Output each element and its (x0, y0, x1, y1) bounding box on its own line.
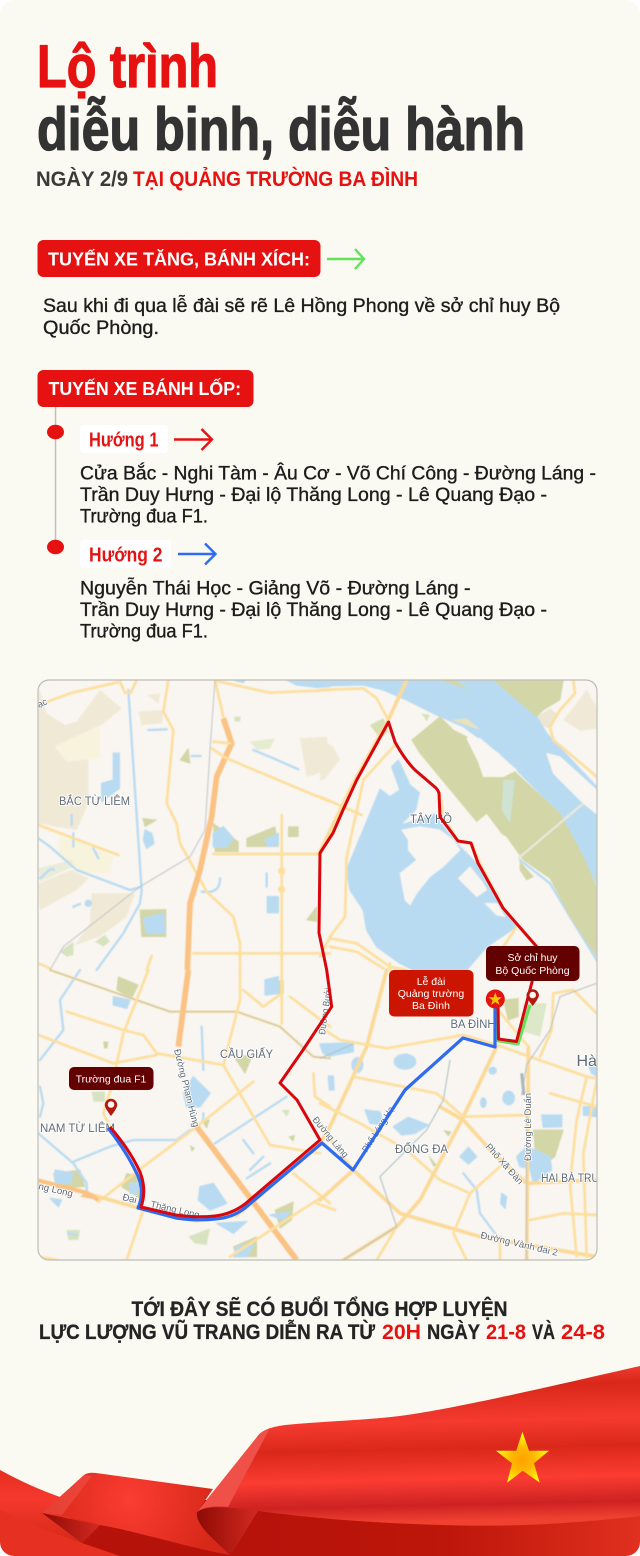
footer note: 24-8 (561, 1321, 605, 1344)
text: direction 1 route: Trường đua F1. (80, 506, 208, 528)
map: place names: NAM TỪ LIÊM (40, 1122, 115, 1135)
map: street names: Thăng Long (149, 1199, 201, 1221)
label: direction 1: Hướng 1 (89, 430, 158, 452)
footer note: NGÀY (427, 1321, 480, 1344)
title: Lộ trình (37, 33, 218, 100)
map: street names: Đường Láng (310, 1115, 350, 1160)
map: place names: BA ĐÌNH (450, 1018, 496, 1031)
heading: wheeled route (38, 370, 254, 407)
star (496, 1432, 549, 1483)
map: place names (40, 795, 625, 1185)
map: place names: HAI BÀ TRƯNG (541, 1172, 616, 1185)
callout: monument: Ba Đình (412, 1000, 450, 1012)
map: street names: Đường Phạm Hùng (171, 1048, 201, 1128)
callout: F1 track: Trường đua F1 (76, 1074, 147, 1086)
map: place names: BẮC TỪ LIÊM (59, 795, 130, 808)
text: direction 2 route: Trần Duy Hưng - Đại lộ Thăng Long - Lê Quang Đạo - (80, 599, 547, 621)
text: tank route description: Quốc Phòng. (43, 317, 159, 339)
map: land use patches (38, 687, 597, 1257)
map border (38, 680, 597, 1260)
map: street names: Đường Vành đai 2 (479, 1230, 559, 1259)
map: street names: Phố Láng Hạ (360, 1104, 397, 1155)
text: tank route description (43, 294, 560, 339)
callout: command post: Bộ Quốc Phòng (495, 965, 570, 977)
heading: tank route: TUYẾN XE TĂNG, BÁNH XÍCH: (48, 248, 310, 270)
arrow: blue (178, 544, 216, 564)
footer note: TỚI ĐÂY SẼ CÓ BUỔI TỔNG HỢP LUYỆN (132, 1297, 508, 1321)
text: direction 2 route: Trường đua F1. (80, 620, 208, 642)
label: direction 2: Hướng 2 (89, 544, 162, 566)
text: direction 1 route: Trần Duy Hưng - Đại lộ Thăng Long - Lê Quang Đạo - (80, 484, 547, 506)
map: street names: Đại (121, 1192, 138, 1206)
route: direction 1 (red) (110, 722, 537, 1217)
heading: wheeled route: TUYẾN XE BÁNH LỐP: (48, 378, 241, 399)
map: place names: CẦU GIẤY (220, 1048, 273, 1061)
title (37, 33, 525, 163)
map: place names: TÂY HỒ (410, 813, 452, 826)
pin: command post (526, 989, 539, 1006)
subtitle: NGÀY 2/9 (36, 168, 128, 191)
callout: monument (389, 970, 474, 1016)
footer note: 21-8 (486, 1321, 526, 1344)
map: water (38, 680, 597, 1257)
subtitle (36, 167, 418, 191)
text: direction 2 route: Nguyễn Thái Học - Giảng Võ - Đường Láng - (80, 576, 470, 600)
footer note: VÀ (532, 1321, 555, 1344)
footer note: 20H (382, 1321, 421, 1344)
timeline (47, 406, 64, 554)
callout: monument: Quảng trường (398, 988, 464, 1000)
pin: monument star (486, 990, 505, 1008)
map: street names: Đường Bưởi (317, 987, 335, 1035)
title: diễu binh, diễu hành (37, 96, 525, 163)
label: direction 2 (80, 540, 171, 568)
text: tank route description: Sau khi đi qua lễ đài sẽ rẽ Lê Hồng Phong về sở chỉ huy Bộ (43, 294, 560, 317)
route: direction 2 (blue) (108, 1003, 495, 1220)
map: street names: Đường Lê Duẩn (523, 1093, 534, 1161)
arrow: green (327, 249, 364, 269)
flag ribbon (0, 1366, 640, 1556)
map: place names: ĐỐNG ĐA (395, 1142, 448, 1156)
callout: F1 track (69, 1067, 154, 1090)
heading: tank route (38, 240, 320, 277)
callout: command post: Sở chỉ huy (507, 952, 558, 964)
callout: monument: Lễ đài (417, 975, 445, 988)
callout: command post (486, 946, 580, 981)
map: street names (36, 696, 559, 1259)
arrow: red (174, 429, 212, 450)
map: base layers (38, 680, 597, 1260)
map: green parks beside river (412, 680, 597, 957)
map: roads (38, 680, 597, 1260)
map: street names: ng Long (37, 1181, 74, 1200)
text: direction 1 route: Cửa Bắc - Nghi Tàm - Âu Cơ - Võ Chí Công - Đường Láng - (80, 462, 596, 484)
map: street names: Phố Xã Đàn (483, 1142, 525, 1187)
route: tank (green) (496, 1003, 530, 1044)
map: street names: ạc (36, 696, 50, 711)
footer note: LỰC LƯỢNG VŨ TRANG DIỄN RA TỪ (39, 1320, 376, 1344)
text: direction 2 route (80, 576, 547, 642)
footer note (39, 1297, 605, 1344)
map: place names: Hà Nội (576, 1053, 625, 1070)
pin: F1 track (105, 1099, 117, 1116)
label: direction 1 (80, 425, 168, 453)
map panel (36, 680, 625, 1260)
text: direction 1 route (80, 462, 596, 528)
subtitle: TẠI QUẢNG TRƯỜNG BA ĐÌNH (133, 167, 418, 191)
